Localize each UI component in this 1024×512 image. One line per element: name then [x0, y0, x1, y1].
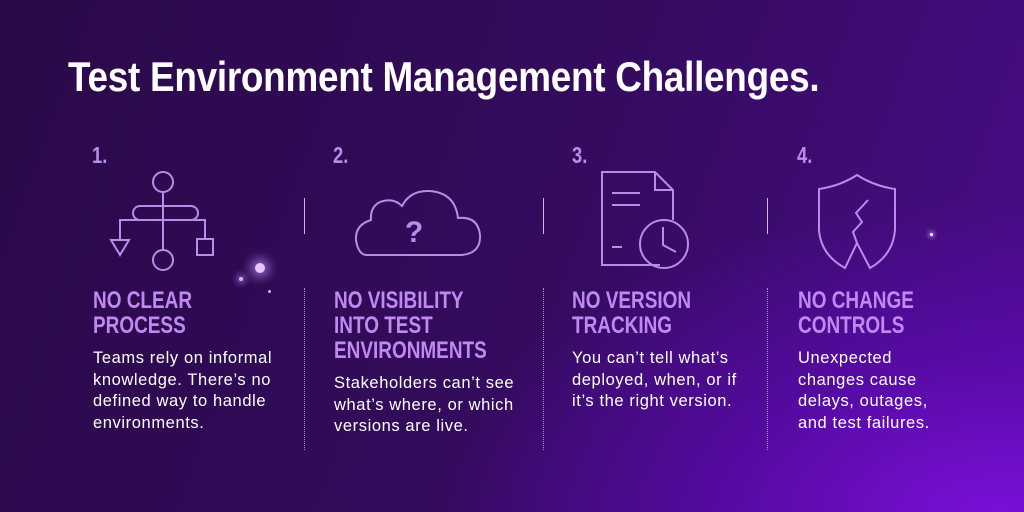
title: Test Environment Management Challenges. — [68, 53, 819, 100]
icon: cloud question: ? — [405, 216, 423, 249]
body 1: environments. — [93, 414, 204, 432]
number 3: 3. — [572, 142, 587, 168]
icon: process flow — [111, 172, 213, 270]
body 4: Unexpected — [798, 349, 892, 367]
heading 4: NO CHANGE — [798, 287, 914, 314]
heading 4 — [798, 287, 914, 339]
icon: cloud question — [356, 191, 480, 255]
body 1: Teams rely on informal — [93, 349, 272, 367]
body 1: knowledge. There’s no — [93, 370, 271, 388]
body 4: and test failures. — [798, 414, 930, 432]
icon: document clock — [602, 172, 688, 268]
heading 2: INTO TEST — [334, 312, 433, 339]
heading 1: NO CLEAR — [93, 287, 192, 314]
body 1 — [93, 349, 272, 432]
body 4: delays, outages, — [798, 392, 928, 410]
body 3: deployed, when, or if — [572, 370, 737, 388]
heading 3: NO VERSION — [572, 287, 691, 314]
heading 3 — [572, 287, 691, 339]
body 3: it’s the right version. — [572, 392, 732, 410]
body 3: You can’t tell what’s — [572, 349, 729, 367]
number 4: 4. — [797, 142, 812, 168]
body 1: defined way to handle — [93, 392, 266, 410]
heading 4: CONTROLS — [798, 312, 904, 339]
body 4 — [798, 349, 930, 432]
body 4: changes cause — [798, 370, 917, 388]
heading 2 — [334, 287, 487, 364]
heading 3: TRACKING — [572, 312, 672, 339]
heading 2: ENVIRONMENTS — [334, 337, 487, 364]
heading 1 — [93, 287, 192, 339]
number 1: 1. — [92, 142, 107, 168]
heading 1: PROCESS — [93, 312, 186, 339]
body 2 — [334, 374, 514, 435]
body 2: Stakeholders can’t see — [334, 374, 514, 392]
body 2: versions are live. — [334, 417, 469, 435]
body 3 — [572, 349, 737, 410]
body 2: what’s where, or which — [334, 396, 514, 414]
number 2: 2. — [333, 142, 348, 168]
heading 2: NO VISIBILITY — [334, 287, 464, 314]
glows — [255, 263, 265, 273]
icon: cracked shield — [819, 175, 895, 268]
